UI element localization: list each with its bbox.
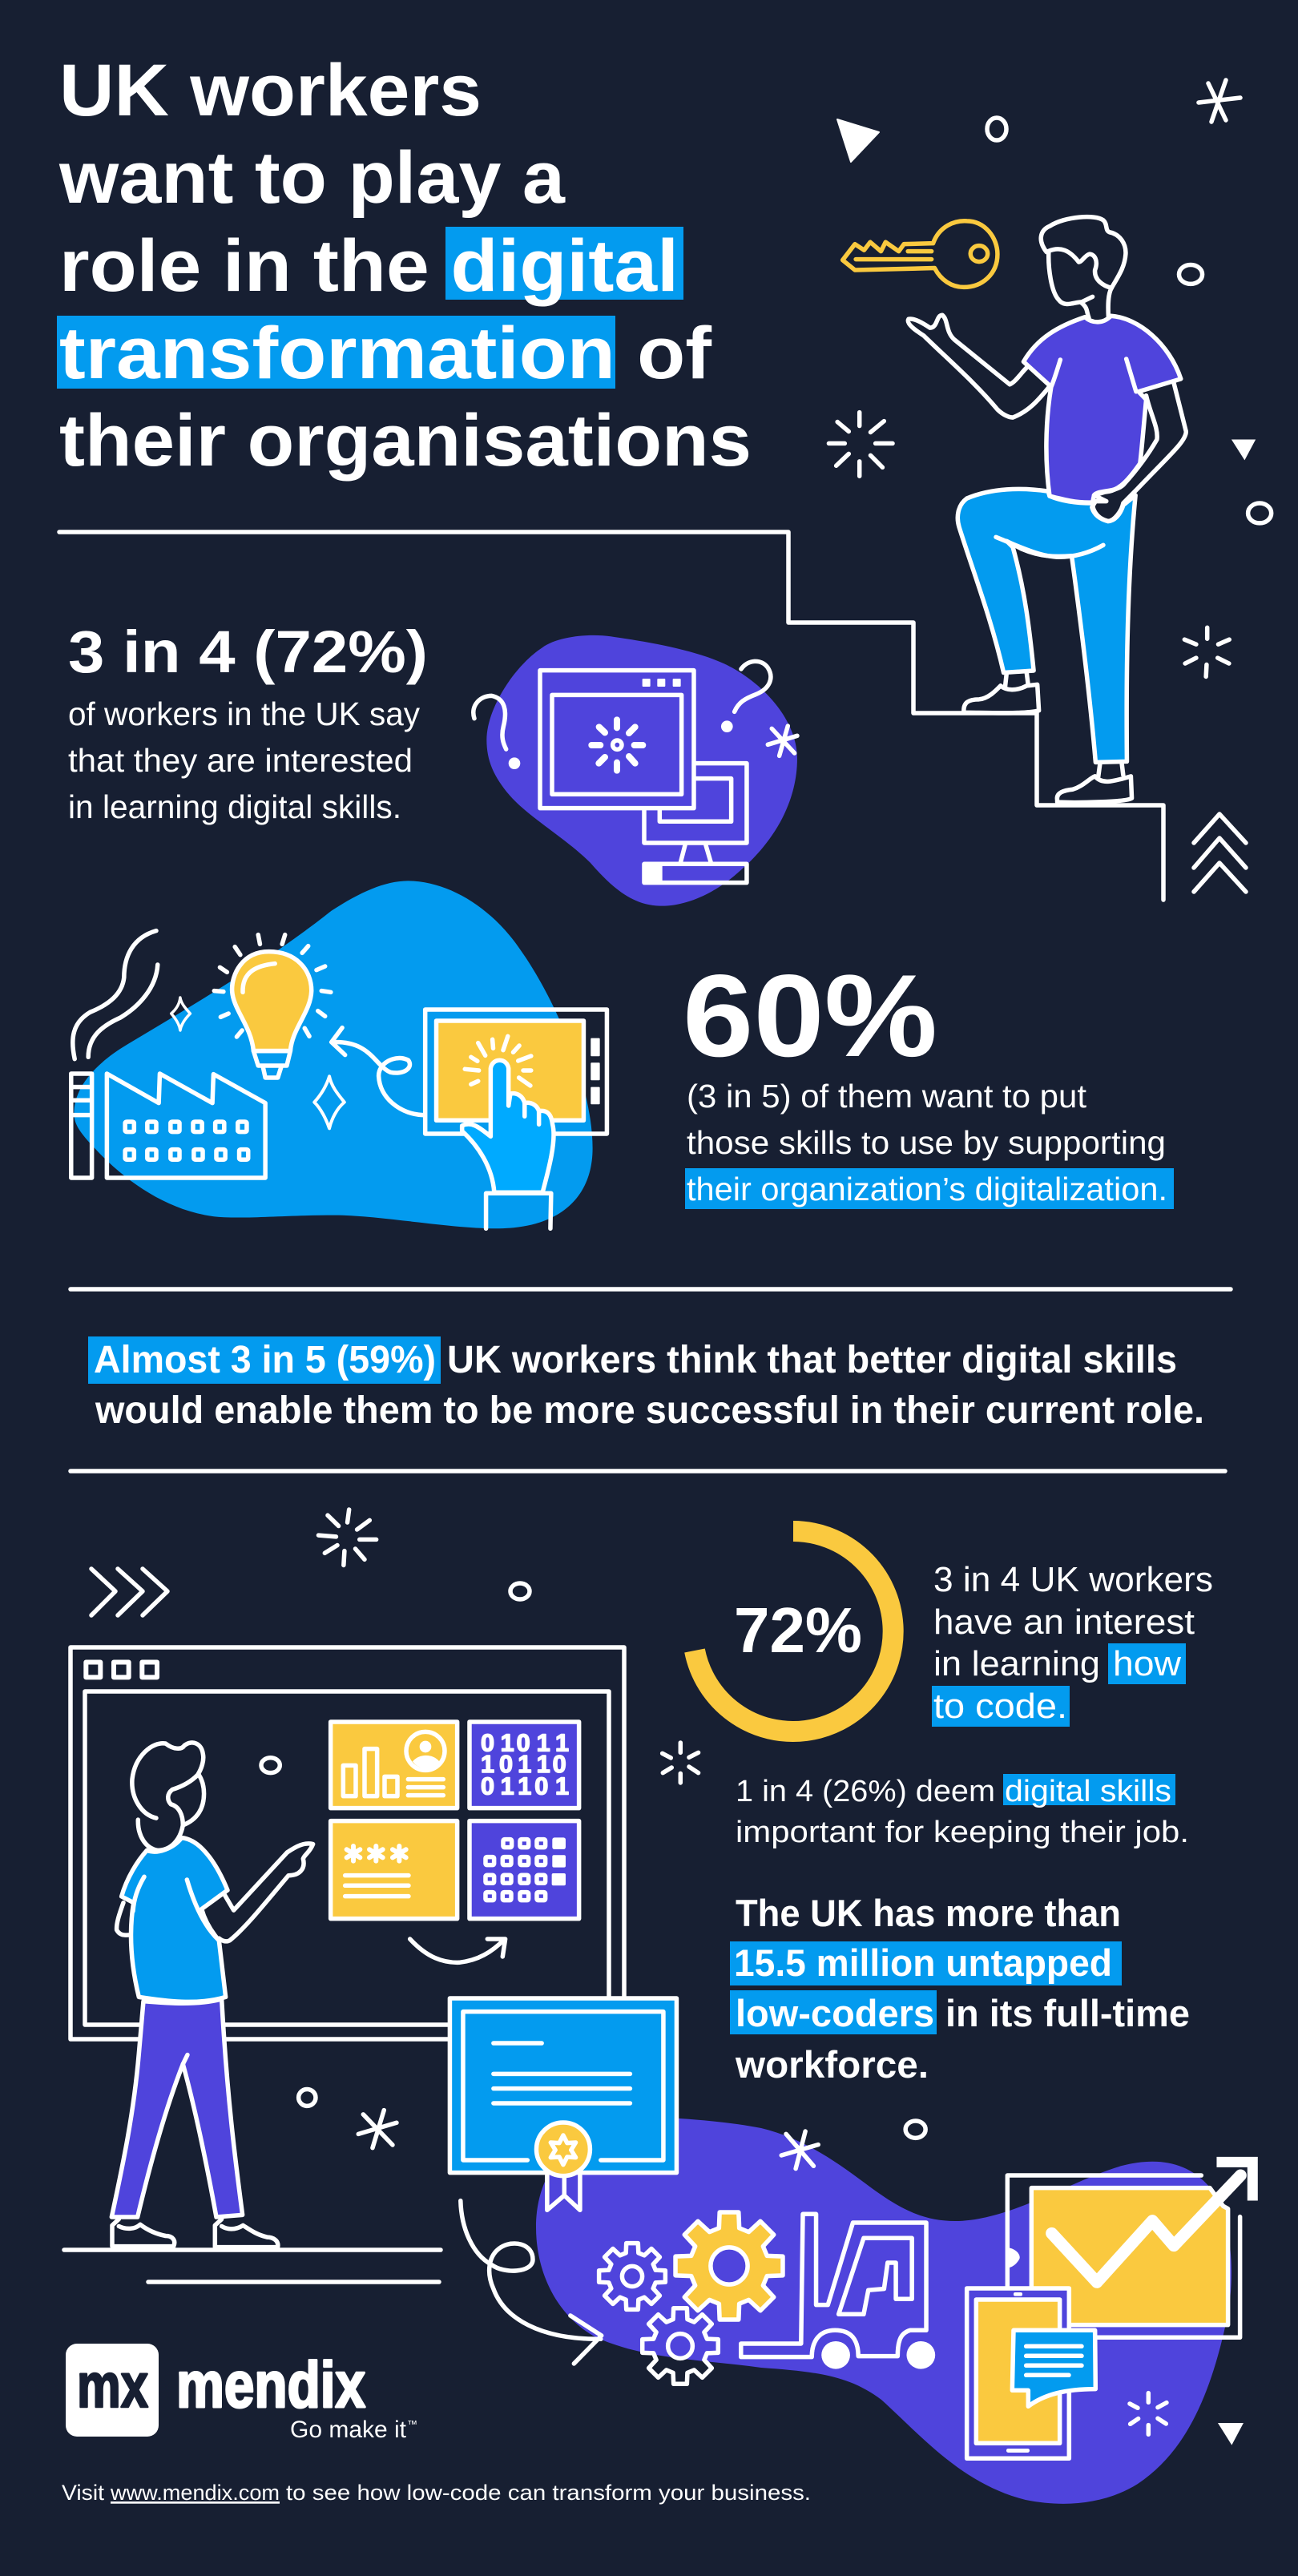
man: raised arm xyxy=(908,315,1050,417)
browser window xyxy=(540,671,694,808)
board outer frame xyxy=(71,1647,624,2039)
man: trousers xyxy=(111,1999,243,2217)
asterisk xyxy=(768,726,797,756)
asterisk ornament top xyxy=(1199,80,1240,122)
binary row 3: 01101 xyxy=(481,1773,569,1800)
triangle ornament top xyxy=(837,119,879,162)
tablet buttons xyxy=(591,1039,599,1103)
man: hair xyxy=(1041,217,1126,288)
spinner centre xyxy=(613,740,622,749)
statement highlighted text: Almost 3 in 5 (59%) xyxy=(94,1339,436,1381)
title line 5: their organisations xyxy=(59,400,752,482)
sparkle above board xyxy=(318,1510,377,1565)
highlight: to code xyxy=(932,1686,1070,1727)
password asterisks xyxy=(347,1846,406,1861)
illustration: certificate, arrow and forklift xyxy=(449,1998,935,2369)
stat: 60% xyxy=(683,950,1174,1209)
man: right shoe xyxy=(215,2219,278,2247)
logo tagline: Go make it xyxy=(290,2417,407,2443)
illustration: factory, bulb and tablet on blue blob xyxy=(71,881,607,1228)
chevrons right xyxy=(91,1569,167,1615)
loading spinner xyxy=(591,720,643,771)
circle ornament xyxy=(261,1758,280,1773)
keyboard filled block xyxy=(643,863,663,884)
question mark right xyxy=(735,661,771,712)
title highlight: transformation xyxy=(57,316,615,389)
triangle ornament xyxy=(1218,2423,1244,2445)
phone speaker xyxy=(1014,2292,1022,2296)
circle ornament xyxy=(1248,503,1272,523)
stat body line 1: (3 in 5) of them want to put xyxy=(687,1078,1087,1115)
man: front shoe xyxy=(1057,762,1132,803)
logo badge letters: mx xyxy=(77,2350,148,2421)
forklift wheel xyxy=(906,2341,935,2369)
man: left shoe xyxy=(112,2219,175,2247)
binary row 1: 01011 xyxy=(481,1729,569,1756)
gear small lower xyxy=(643,2308,718,2384)
card: chart and profile xyxy=(331,1722,458,1808)
illustration: man pointing at board xyxy=(86,1663,397,2247)
question dot right xyxy=(721,720,733,732)
light bulb xyxy=(232,952,312,1051)
title line 1: UK workers xyxy=(59,50,482,131)
window buttons xyxy=(643,679,680,686)
donut arc xyxy=(695,1531,893,1731)
growth line xyxy=(1052,2175,1240,2282)
title line 4: transformation of xyxy=(59,312,711,394)
profile avatar ring xyxy=(406,1731,445,1770)
badge star xyxy=(550,2135,576,2165)
purple blob xyxy=(486,635,797,906)
icon: key xyxy=(843,221,998,287)
sparkle xyxy=(1130,2393,1167,2434)
desktop monitor back screen xyxy=(644,764,747,843)
footer text start: Visit xyxy=(62,2481,105,2505)
logo: mendix xyxy=(66,2344,417,2443)
chimney xyxy=(71,1074,92,1178)
text: 15.5 million low-coders xyxy=(730,1892,1190,2086)
highlight: their organization's digitalization xyxy=(685,1168,1174,1209)
question dot left xyxy=(509,757,520,769)
circle ornament xyxy=(510,1583,530,1599)
looped arrow xyxy=(461,2201,602,2364)
man: t-shirt xyxy=(122,1838,228,2002)
statement line 2: would enable them to be more successful in their current role. xyxy=(95,1389,1204,1432)
blue blob xyxy=(74,881,593,1228)
stat body line 1: of workers in the UK say xyxy=(68,695,420,732)
circle ornament xyxy=(1179,265,1203,284)
bar chart xyxy=(343,1749,397,1796)
man: sleeve lines xyxy=(133,1877,219,1941)
bulb base xyxy=(253,1051,290,1078)
profile text lines xyxy=(408,1780,443,1796)
stat body line 3: in learning digital skills. xyxy=(68,788,401,825)
logo trademark: ™ xyxy=(407,2418,417,2430)
password text lines xyxy=(345,1876,409,1897)
growth arrow head xyxy=(1222,2162,1252,2195)
highlight: how xyxy=(1108,1643,1186,1684)
footer note xyxy=(62,2481,811,2505)
browser inner pane xyxy=(552,695,682,794)
phone home bar xyxy=(1006,2449,1030,2453)
diamond large xyxy=(314,1076,345,1128)
card: binary code xyxy=(470,1722,579,1808)
text: learning how to code xyxy=(932,1560,1213,1727)
sparkle beside board xyxy=(663,1743,699,1783)
curved arrow between cards xyxy=(410,1939,506,1962)
forklift wheel xyxy=(821,2341,850,2369)
badge xyxy=(536,2122,590,2176)
certificate text lines xyxy=(494,2043,630,2103)
asterisk xyxy=(358,2110,397,2148)
finger lines xyxy=(525,1103,539,1124)
factory building xyxy=(107,1074,265,1178)
stat: 3 in 4 (72%) xyxy=(68,619,428,825)
man: crotch detail xyxy=(183,2055,187,2064)
stair line xyxy=(59,532,1163,900)
dashboard cards xyxy=(331,1722,699,1962)
keypad keys xyxy=(486,1837,566,1901)
man: rear shoe xyxy=(964,672,1039,713)
monitor stand xyxy=(680,845,711,863)
chat bubble lines xyxy=(1026,2346,1082,2375)
circle ornament xyxy=(905,2121,925,2138)
chart panel xyxy=(1031,2188,1228,2325)
line 2: important for keeping their job. xyxy=(736,1816,1189,1849)
man: pointing arm xyxy=(219,1844,313,1941)
asterisk xyxy=(781,2131,818,2169)
chat bubble xyxy=(1012,2330,1095,2406)
bulb highlight xyxy=(243,964,275,992)
illustration: growth chart and phone xyxy=(967,2162,1252,2458)
donut value: 72% xyxy=(734,1594,862,1666)
shirt cuff xyxy=(486,1193,551,1228)
statement: 59% xyxy=(88,1336,1204,1432)
line 4: to code. xyxy=(933,1687,1067,1726)
man: hair xyxy=(132,1743,204,1850)
statement line 1: UK workers think that better digital skills xyxy=(447,1339,1177,1381)
man: rear arm xyxy=(117,1903,131,1935)
keyboard bar xyxy=(644,864,747,883)
title xyxy=(57,50,752,482)
logo badge xyxy=(66,2344,159,2437)
gear small upper xyxy=(599,2243,665,2309)
forklift body xyxy=(741,2214,926,2357)
circle ornament top xyxy=(987,118,1006,140)
triangle ornament xyxy=(1231,439,1256,460)
binary row 2: 10110 xyxy=(481,1751,566,1778)
circle ornament xyxy=(299,2089,316,2106)
text: digital skills for keeping job xyxy=(736,1774,1189,1849)
purple blob bottom xyxy=(536,2118,1231,2504)
illustration: man climbing stairs with key xyxy=(828,217,1272,803)
stat heading: 60% xyxy=(683,950,937,1081)
chevrons up xyxy=(1194,814,1246,892)
frame tab xyxy=(1007,2247,1020,2268)
line 3 highlighted: low-coders xyxy=(736,1992,934,2034)
donut chart: 72% xyxy=(695,1531,893,1731)
card: keypad xyxy=(470,1821,579,1919)
sparkle: right of man xyxy=(1184,627,1229,676)
stat body line 2: those skills to use by supporting xyxy=(687,1124,1166,1161)
gear large xyxy=(675,2212,783,2320)
man: trousers xyxy=(957,489,1135,762)
line 3 highlighted: how xyxy=(1113,1644,1181,1683)
card: password xyxy=(331,1821,458,1919)
footer link: www.mendix.com xyxy=(110,2481,280,2505)
forklift cab xyxy=(839,2238,912,2314)
factory windows xyxy=(125,1122,248,1159)
highlight: almost 3 in 5 xyxy=(88,1336,441,1384)
line 1: 1 in 4 (26%) deem xyxy=(736,1775,995,1808)
line 4: workforce. xyxy=(735,2043,929,2086)
highlight: 15.5 million untapped xyxy=(730,1941,1122,1985)
title line 3: role in the digital xyxy=(59,225,679,307)
highlight: low-coders xyxy=(730,1990,937,2034)
man: face and neck xyxy=(1049,252,1111,318)
touch sparks xyxy=(465,1036,531,1086)
board inner frame xyxy=(85,1691,609,2025)
line 3: in learning xyxy=(933,1644,1100,1683)
line 2: have an interest xyxy=(933,1602,1195,1642)
window buttons xyxy=(86,1663,157,1677)
phone screen xyxy=(976,2300,1060,2443)
tablet frame xyxy=(425,1010,607,1134)
bulb rays xyxy=(214,935,331,1037)
looped arrow to bulb xyxy=(332,1028,423,1115)
man: knee line xyxy=(996,537,1103,557)
chart back frame xyxy=(1007,2175,1240,2337)
certificate inner frame xyxy=(463,2012,663,2160)
profile shoulders xyxy=(413,1756,439,1768)
sparkle: left of man xyxy=(828,413,893,476)
line 1: 3 in 4 UK workers xyxy=(933,1560,1213,1599)
title highlight: digital xyxy=(445,227,683,300)
desktop monitor inner screen xyxy=(659,779,732,821)
tablet screen xyxy=(437,1021,583,1120)
profile head xyxy=(420,1741,431,1752)
diamond small xyxy=(171,998,190,1030)
logo wordmark: mendix xyxy=(176,2349,365,2421)
line 3: in its full-time xyxy=(945,1992,1190,2034)
pointing hand xyxy=(462,1060,554,1192)
phone body xyxy=(967,2288,1069,2458)
man: sleeve lines xyxy=(1051,359,1136,392)
man: face xyxy=(183,1775,204,1825)
question mark left xyxy=(474,695,506,749)
line 1: The UK has more than xyxy=(736,1892,1121,1934)
title line 2: want to play a xyxy=(58,137,566,219)
badge ribbon xyxy=(547,2175,580,2210)
footer text end: to see how low-code can transform your business. xyxy=(286,2481,811,2505)
illustration: monitor on purple blob xyxy=(474,635,797,906)
man: t-shirt xyxy=(1023,316,1181,502)
stat heading: 3 in 4 (72%) xyxy=(68,619,428,685)
certificate xyxy=(449,1998,676,2173)
highlight: digital skills xyxy=(1003,1774,1175,1805)
line 1 highlighted: digital skills xyxy=(1005,1775,1171,1808)
line 2: 15.5 million untapped xyxy=(734,1941,1112,1984)
stat body line 2: that they are interested xyxy=(68,742,413,779)
stat body line 3: their organization’s digitalization. xyxy=(687,1171,1167,1207)
man: arm on hip xyxy=(1092,383,1186,521)
smoke xyxy=(73,931,158,1059)
